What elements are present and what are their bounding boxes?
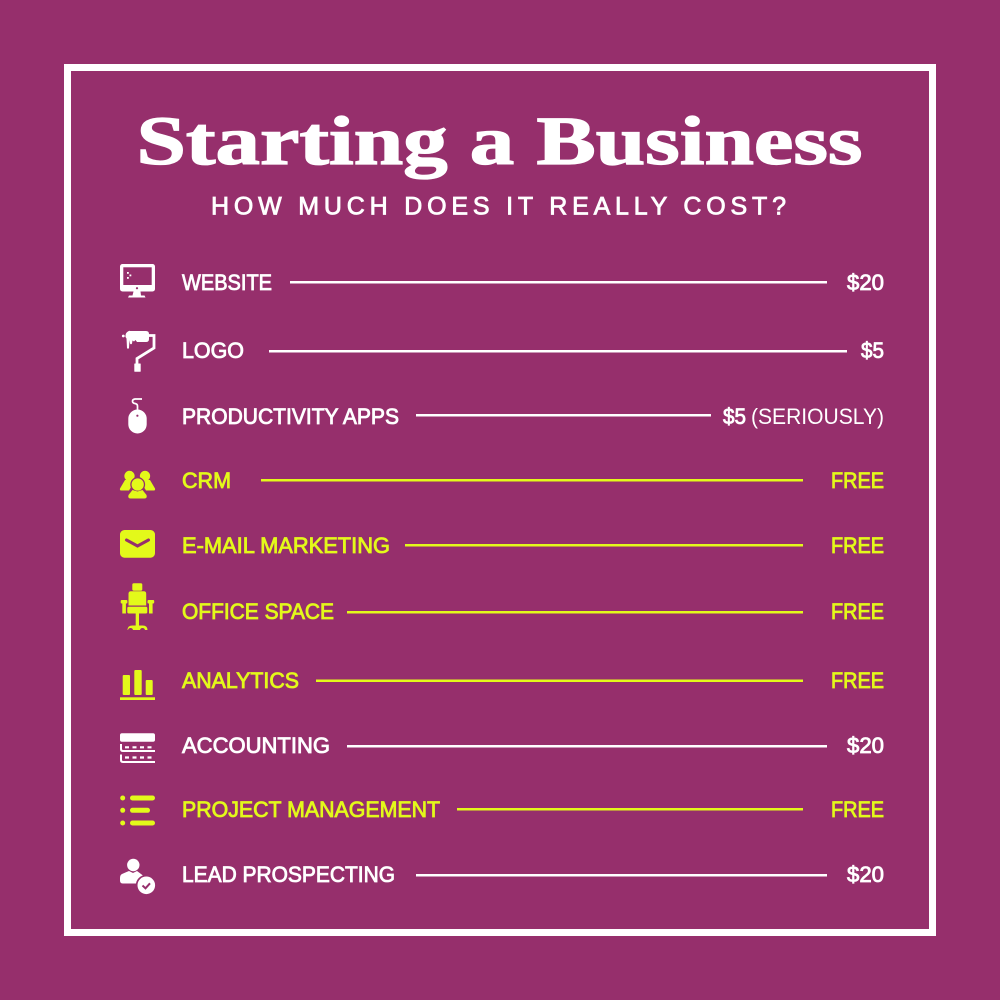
label: OFFICE SPACE — [182, 599, 334, 624]
subtitle: HOW MUCH DOES IT REALLY COST? — [211, 192, 786, 220]
row: crm — [120, 468, 884, 498]
label: ANALYTICS — [182, 668, 299, 693]
leader line — [347, 611, 803, 614]
title: Starting a Business — [136, 103, 862, 179]
leader line — [416, 414, 711, 416]
row: office space — [121, 583, 884, 630]
status: FREE — [831, 468, 884, 493]
icon: checklist — [120, 796, 155, 826]
row: accounting — [120, 733, 884, 762]
leader line — [261, 479, 803, 482]
icon: envelope — [120, 530, 155, 558]
leader line — [416, 874, 827, 876]
icon: paint roller — [122, 330, 154, 372]
price note: (SERIOUSLY) — [751, 404, 884, 429]
row: productivity apps — [128, 399, 884, 434]
row: logo — [122, 330, 884, 372]
label: ACCOUNTING — [182, 733, 330, 758]
row: website — [120, 264, 884, 298]
leader line — [347, 745, 827, 748]
row: project management — [120, 796, 884, 826]
row: e-mail marketing — [120, 530, 884, 558]
icon: mouse — [128, 399, 147, 434]
price: $20 — [847, 270, 884, 295]
price: $5 — [723, 404, 746, 429]
leader line — [316, 680, 803, 682]
status: FREE — [831, 797, 884, 822]
price: $20 — [847, 733, 884, 758]
icon: verified person — [120, 859, 157, 896]
label: LOGO — [182, 338, 244, 363]
icon: ledger — [120, 733, 155, 762]
icon: bar chart — [120, 670, 155, 700]
label: CRM — [182, 468, 231, 493]
icon: monitor — [120, 264, 155, 298]
price: $20 — [847, 862, 884, 887]
price: $5 — [861, 338, 884, 363]
leader line — [457, 808, 803, 810]
label: WEBSITE — [182, 270, 272, 295]
leader line — [290, 281, 827, 284]
row: lead prospecting — [120, 859, 884, 896]
label: PRODUCTIVITY APPS — [182, 404, 399, 429]
white frame — [68, 68, 932, 932]
label: LEAD PROSPECTING — [182, 862, 395, 887]
status: FREE — [831, 599, 884, 624]
icon: people — [120, 471, 155, 498]
row: analytics — [120, 668, 884, 700]
icon: office chair — [121, 583, 154, 630]
leader line — [405, 544, 803, 546]
status: FREE — [831, 533, 884, 558]
label: E-MAIL MARKETING — [182, 533, 390, 558]
status: FREE — [831, 668, 884, 693]
label: PROJECT MANAGEMENT — [182, 797, 440, 822]
leader line — [269, 350, 847, 352]
